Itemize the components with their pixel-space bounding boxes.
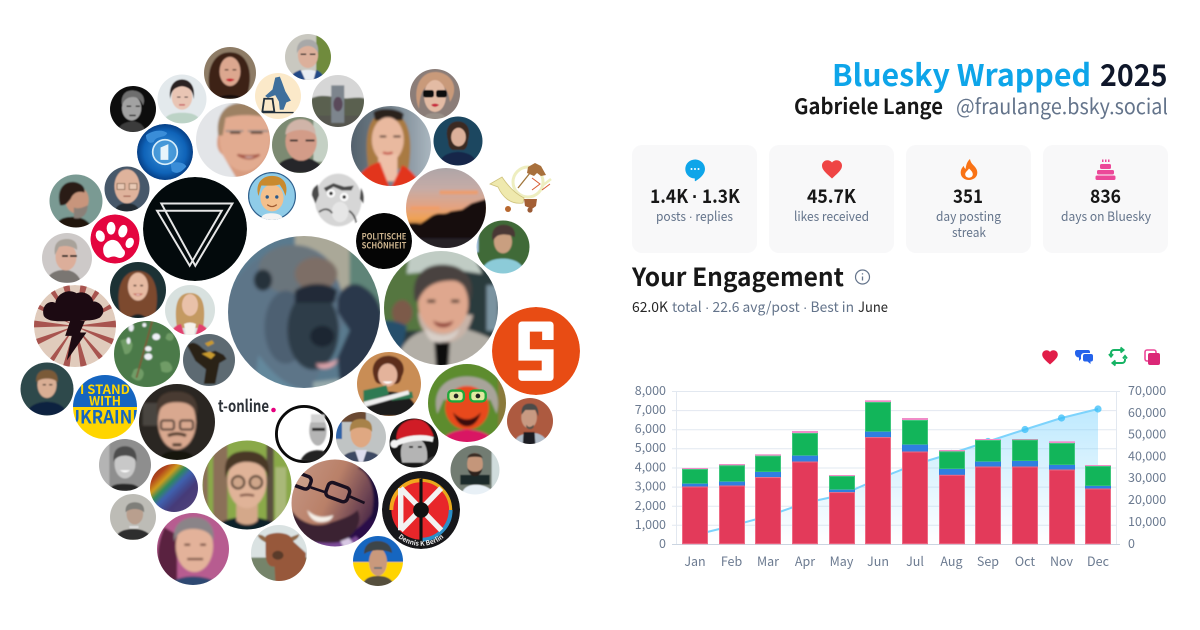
avatar: painted man on ukraine flag [348,531,408,592]
chart: monthly engagement bars with cumulative line [635,380,1166,570]
month labels: Oct [1015,551,1035,570]
right axis labels: 50,000 [1128,424,1166,442]
left axis labels: 2,000 [635,495,666,514]
avatar: man in blue suit with glasses [285,34,331,80]
avatar: man on pink background [157,513,229,585]
bar: Oct [1012,439,1038,544]
icon: quotes [1145,350,1160,365]
engagement summary: total · 22.6 avg/post · Best in [672,297,854,317]
bar: Aug [939,450,965,544]
bar: Sep [975,439,1001,544]
left axis labels: 8,000 [635,380,666,399]
avatar: dennis k berlin logo: Dennis K Berlin [398,534,444,546]
avatar: politische schoenheit logo: SCHÖNHEIT [362,239,406,251]
month labels: Jul [906,551,924,570]
avatar: blonde woman in pink jacket [165,285,215,335]
left axis labels: 1,000 [635,514,666,533]
avatar: woman with red lips [204,47,256,99]
title: Bluesky Wrapped [832,51,1091,95]
panel: likes received: likes received [794,206,869,225]
left axis labels: 3,000 [635,476,666,494]
month labels: Dec [1087,551,1110,570]
panel: likes received [769,145,894,253]
avatar: i stand with ukraine: UKRAINE [67,403,143,430]
panel: day posting streak: 351 [953,182,983,209]
icon: heart [822,160,842,178]
icon: birthday cake [1096,160,1116,180]
avatar: orange s logo [492,307,580,395]
avatar: man against brick wall [502,393,558,449]
user name and handle [794,91,1168,121]
avatar: black and white smiling man [99,439,151,491]
avatar: woman with dark hair [158,74,206,124]
icon: reposts [1109,348,1127,366]
panel: day posting streak: streak [952,222,987,241]
avatar: gorilla [228,236,380,388]
left axis labels: 5,000 [635,437,666,456]
panel: days on bluesky: 836 [1090,182,1121,209]
user name and handle: Gabriele Lange [794,91,943,121]
title: 2025 [1100,51,1168,95]
avatar: storm cloud and lightning on rays [34,285,116,367]
right axis labels: 10,000 [1128,511,1166,530]
right axis labels: 40,000 [1128,446,1166,464]
avatar: black and white portrait [110,86,156,132]
avatar: politische schoenheit logo: POLITISCHE [362,230,406,242]
left axis labels [635,380,666,552]
avatar: highland cow [251,525,307,581]
avatar: i stand with ukraine: WITH [89,391,121,410]
avatar: blonde woman in red jacket [351,106,431,186]
avatar: batman with walker illustration [255,73,301,119]
avatar: older man in dark jacket [110,494,156,540]
right axis labels: 20,000 [1128,489,1166,508]
avatar: man with glasses in forest [202,440,292,530]
avatar bubble cloud [20,34,580,586]
bar: Apr [792,431,818,544]
avatar: politische schoenheit logo [356,213,412,269]
right axis labels: 70,000 [1128,380,1166,399]
left axis labels: 7,000 [635,399,666,418]
month labels: Jan [684,551,706,570]
bar: Jul [902,418,928,544]
avatar: rainbow on dark surface [150,464,198,512]
avatar: bald man with round glasses [104,166,150,212]
panel: likes received: 45.7K [807,182,857,209]
panel: day posting streak [906,145,1031,253]
panel: posts and replies: posts · replies [656,206,733,225]
left axis labels: 6,000 [635,418,666,437]
right axis labels [1128,380,1166,552]
panel: day posting streak: day posting [936,206,1002,225]
panel: days on bluesky: days on Bluesky [1061,206,1151,225]
avatar: plant with white flowers [114,321,180,387]
panel: days on bluesky [1043,145,1168,253]
icon: flame [961,159,977,180]
avatar: woman on blue background [434,116,482,166]
avatar: smiling man in grey jacket [384,251,498,365]
chart legend icons [1042,348,1160,366]
avatar: i stand with ukraine: I STAND [80,379,130,398]
avatar: grumpy muppet sketch [310,173,365,227]
avatar: double triangle logo [143,177,247,281]
avatar: laughing woman lying on wood [351,346,427,422]
left axis labels: 0 [659,533,666,552]
avatar: tagesschau globe [137,124,193,180]
panel: posts and replies [632,145,757,253]
month labels [684,551,1110,570]
bar: Nov [1049,441,1075,544]
right axis labels: 60,000 [1128,402,1166,421]
icon: replies [1075,350,1093,364]
avatar: man with glasses and goatee [139,384,215,460]
icon: like [1042,350,1058,364]
avatar: berlin wall segment [312,75,364,127]
engagement summary: 62.0K [632,297,668,317]
month labels: Feb [721,551,742,570]
avatar: sunset over treeline [406,168,486,248]
cumulative line [695,405,1102,535]
panel: posts and replies: 1.4K · 1.3K [650,182,741,209]
month labels: May [830,551,854,570]
avatar: smiling man with glasses [196,103,270,177]
month labels: Aug [940,551,963,570]
user name and handle: @fraulange.bsky.social [956,91,1168,121]
bar: May [829,475,855,544]
cumulative area [695,409,1098,544]
avatar: orange muppet with green glasses [420,356,514,450]
grid lines [672,391,1120,544]
icon: info [856,270,870,284]
month labels: Mar [757,551,779,570]
avatar: bearded man in white shirt [446,441,504,499]
bar: Jan [682,468,708,544]
right axis labels: 0 [1128,533,1135,552]
avatar: woman in santa hat [385,414,443,472]
avatar: cartoon boy with curly hair [248,172,296,220]
bar: Jun [865,400,891,544]
left axis labels: 4,000 [635,456,666,476]
avatar: grey haired man with dark glasses [42,233,92,283]
avatar: older man with glasses [272,117,328,173]
bar: Dec [1085,465,1111,544]
avatar: woman in mirrored sunglasses [410,69,460,119]
avatar: bearded man in profile [50,174,102,228]
avatar: golden statue [183,334,235,386]
logo: t-online: t-online [218,393,269,417]
avatar: dennis k berlin logo [382,471,460,549]
month labels: Jun [867,551,889,570]
month labels: Apr [795,551,815,570]
bar: Feb [719,464,745,544]
right axis labels: 30,000 [1128,467,1166,486]
avatar: smiling woman with long hair [110,262,166,318]
avatar: young man in light blue shirt [476,220,530,274]
icon: chat bubble [685,159,705,181]
avatar: white paw on red [90,214,140,264]
month labels: Nov [1050,551,1074,570]
bar: Mar [755,454,781,544]
avatar: i stand with ukraine [73,375,137,439]
heading: your engagement: Your Engagement [631,258,844,294]
stacked bars [682,400,1111,544]
avatar: laughing man with purple filter [283,451,387,555]
engagement summary: June [858,297,888,317]
avatar: man in navy suit [20,362,74,416]
icon: posthorn with hobby horse [490,163,551,213]
month labels: Sep [977,551,999,570]
avatar: black ring portrait [276,406,333,463]
avatar: tv presenter in suit [331,407,391,467]
